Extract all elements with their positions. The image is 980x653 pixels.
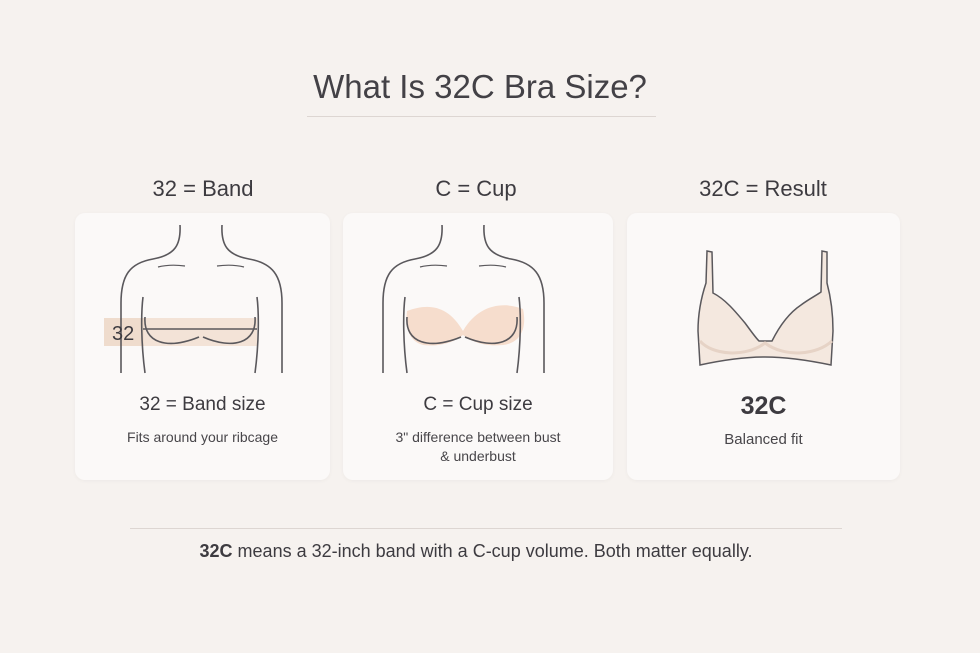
label: cup size: C = Cup size bbox=[423, 394, 533, 415]
caption: cup bbox=[395, 429, 561, 464]
illustration: torso with band: 32 bbox=[112, 323, 134, 345]
title: What Is 32C Bra Size? bbox=[313, 68, 647, 105]
label: 32C: 32C bbox=[741, 392, 786, 420]
panel: result bbox=[627, 213, 900, 480]
summary text: 32C means a 32-inch band with a C-cup volume. Both matter equally. bbox=[200, 541, 752, 561]
caption: balanced fit: Balanced fit bbox=[724, 431, 803, 448]
panel: cup bbox=[343, 213, 613, 480]
heading: band: 32 = Band bbox=[153, 176, 253, 201]
label: band size: 32 = Band size bbox=[139, 394, 266, 415]
caption: band: Fits around your ribcage bbox=[127, 429, 278, 445]
caption: cup: & underbust bbox=[440, 448, 516, 464]
illustration: torso with cups bbox=[382, 225, 545, 374]
heading: cup: C = Cup bbox=[435, 176, 517, 201]
panel: band bbox=[75, 213, 330, 480]
illustration: bra bbox=[697, 250, 834, 366]
illustration: torso with band bbox=[104, 225, 283, 374]
caption: cup: 3" difference between bust bbox=[395, 429, 561, 445]
heading: result: 32C = Result bbox=[699, 176, 827, 201]
